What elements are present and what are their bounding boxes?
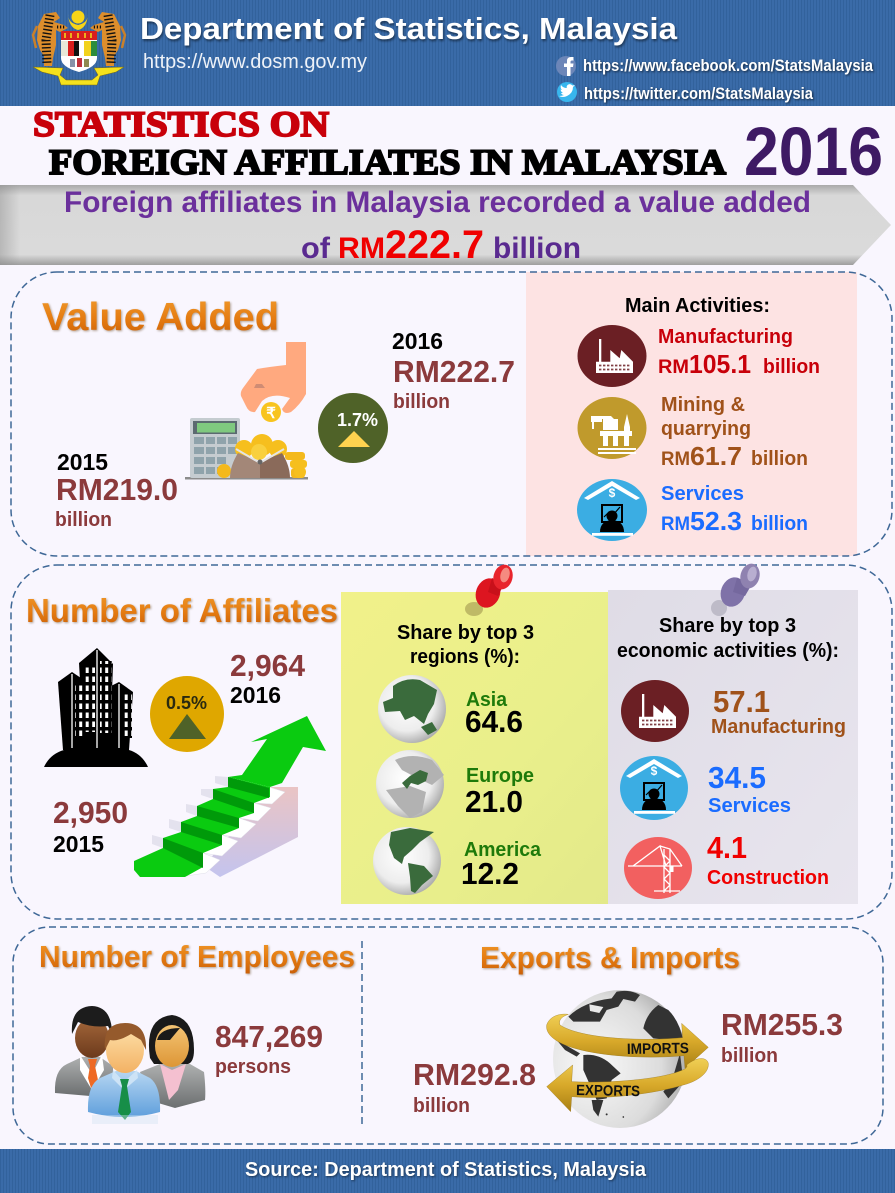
icon: Malaysian coat of arms [33, 10, 125, 85]
website url: https://www.dosm.gov.my [143, 51, 367, 73]
imports value [721, 1007, 843, 1067]
purple push pin [711, 561, 762, 616]
imports value: billion [721, 1045, 778, 1067]
activity: services: 52.3 [690, 506, 742, 536]
heading: exports and imports: Exports & Imports [480, 940, 740, 975]
note: share by top 3 economic activities: economic activities (%): [617, 640, 839, 662]
growth badge: 0.5% [150, 676, 224, 752]
activity: mining and quarrying: quarrying [661, 418, 751, 440]
growth badge: 1.7%: 1.7% [337, 410, 378, 430]
heading: number of employees: Number of Employees [39, 939, 355, 974]
arrow banner: headline value added: of [301, 232, 331, 265]
activity: mining and quarrying: billion [751, 448, 808, 470]
heading: value added: Value Added [42, 296, 279, 339]
arrow banner: headline value added: Foreign affiliates in Malaysia recorded a value added [64, 186, 811, 219]
2015 value: billion [55, 509, 112, 531]
icon: globe with trade arrows: EXPORTS [576, 1082, 640, 1100]
activity: manufacturing: RM [658, 357, 689, 378]
activity: mining and quarrying: 61.7 [690, 441, 742, 471]
title: department name: Department of Statistics, Malaysia [140, 11, 678, 46]
arrow banner: headline value added: 222.7 [385, 223, 484, 267]
share: manufacturing [621, 680, 846, 742]
2015 value: 2015 [57, 449, 108, 475]
share: manufacturing: Manufacturing [711, 716, 846, 738]
icon: globe with trade arrows [547, 990, 708, 1128]
share: construction: 4.1 [707, 830, 747, 865]
exports value: billion [413, 1095, 470, 1117]
note: share by top 3 regions [341, 562, 608, 904]
red push pin [465, 562, 515, 616]
share: construction: Construction [707, 867, 829, 889]
icon: globe with trade arrows: IMPORTS [627, 1040, 689, 1058]
imports value: RM255.3 [721, 1007, 843, 1042]
2015 value: RM219.0 [56, 472, 178, 507]
footer source bar [0, 1149, 895, 1193]
share: construction [624, 830, 829, 899]
icon: facebook [556, 56, 576, 76]
activity: manufacturing [578, 325, 820, 387]
2015 value [55, 449, 178, 531]
icon: three employees [55, 1006, 205, 1124]
panel: value added [11, 272, 892, 556]
2016 value [392, 328, 515, 413]
share: manufacturing: 57.1 [713, 684, 770, 719]
note: share by top 3 regions: 12.2 [461, 856, 519, 891]
note: share by top 3 regions: regions (%): [410, 646, 520, 668]
note: share by top 3 regions: 64.6 [465, 704, 523, 739]
activity: manufacturing: 105.1 [689, 349, 751, 379]
2016 value: 2016 [230, 682, 281, 708]
icon: staircase with rising green arrow [134, 716, 326, 877]
icon: tower crane [628, 846, 682, 893]
arrow banner: headline value added: RM [338, 232, 385, 265]
activity: manufacturing: billion [763, 356, 820, 378]
icon: oil rig [591, 414, 636, 454]
employee count [215, 1019, 323, 1078]
globe: europe [376, 750, 444, 818]
employee count: persons [215, 1056, 291, 1078]
note: share by top 3 regions: 21.0 [465, 784, 523, 819]
heading: year 2016: 2016 [744, 113, 883, 190]
activity: services: billion [751, 513, 808, 535]
activity: mining and quarrying: RM [661, 449, 690, 470]
share: services: 34.5 [708, 760, 766, 795]
activity: mining and quarrying [578, 394, 808, 471]
activity: services: $ [609, 486, 616, 500]
arrow banner: headline value added: billion [493, 232, 581, 265]
activity: mining and quarrying: Mining & [661, 394, 745, 416]
icon: hand, coin, calculator and purse: ₹ [266, 405, 276, 422]
2015 value: 2,950 [53, 795, 128, 830]
growth badge: 1.7% [318, 393, 388, 463]
note: share by top 3 regions: Europe [466, 765, 534, 787]
exports value: RM292.8 [413, 1057, 536, 1092]
2016 value: 2016 [392, 328, 443, 354]
activity: services: RM [661, 514, 690, 535]
panel: number of affiliates [11, 561, 892, 919]
2016 value: billion [393, 391, 450, 413]
note: share by top 3 regions: America [464, 839, 542, 861]
arrow banner: headline value added [0, 185, 891, 267]
heading: statistics on: STATISTICS ON [33, 104, 329, 144]
header banner [0, 0, 895, 106]
employee count: 847,269 [215, 1019, 323, 1054]
icon: twitter [557, 82, 577, 102]
heading: foreign affiliates in malaysia: FOREIGN AFFILIATES IN MALAYSIA [49, 142, 726, 182]
activity: services [577, 479, 808, 541]
panel: employees and trade [13, 927, 883, 1144]
globe: america [373, 827, 441, 895]
note: share by top 3 regions: Share by top 3 [397, 622, 534, 644]
twitter url: https://twitter.com/StatsMalaysia [584, 84, 813, 103]
heading: number of affiliates: Number of Affiliates [26, 592, 338, 629]
heading: main activities: Main Activities: [625, 295, 770, 317]
share: services [620, 756, 791, 820]
activity: services: Services [661, 483, 744, 505]
activity: manufacturing: Manufacturing [658, 326, 793, 348]
note: share by top 3 regions: Asia [466, 689, 508, 711]
2015 value: 2015 [53, 831, 104, 857]
main activities background [526, 272, 857, 556]
icon: hand, coin, calculator and purse [185, 342, 308, 480]
note: share by top 3 economic activities: Share by top 3 [659, 615, 796, 637]
2016 value: RM222.7 [393, 354, 515, 389]
footer source bar: Source: Department of Statistics, Malaysia [245, 1159, 647, 1181]
icon: city buildings [44, 648, 148, 767]
2016 value [230, 648, 306, 708]
2016 value: 2,964 [230, 648, 306, 683]
exports value [413, 1057, 536, 1117]
growth badge: 0.5%: 0.5% [166, 693, 207, 713]
globe: asia [378, 675, 446, 743]
share: services: Services [708, 795, 791, 817]
2015 value [53, 795, 128, 857]
note: share by top 3 economic activities [608, 561, 858, 904]
share: services: $ [651, 764, 658, 778]
